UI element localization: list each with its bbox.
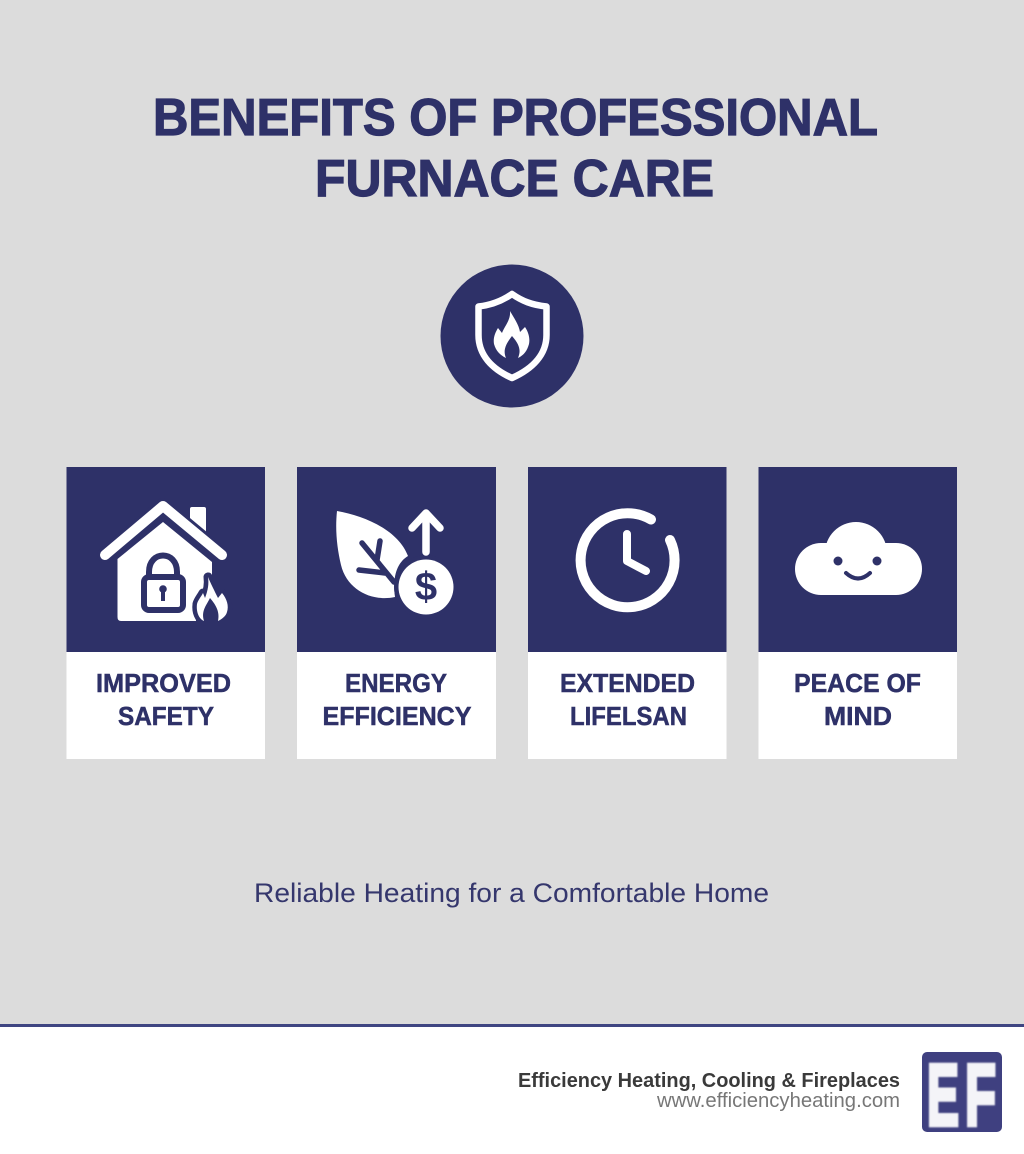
icon: leaf with dollar coin and arrow (336, 511, 458, 619)
website: www.efficiencyheating.com (656, 1090, 900, 1112)
company name: Efficiency Heating, Cooling & Fireplaces (518, 1070, 900, 1092)
label: peace of mind: MIND (824, 701, 892, 731)
label: energy efficiency (322, 668, 472, 731)
icon: clock (581, 513, 675, 607)
label: peace of mind (794, 668, 921, 731)
tagline: Reliable Heating for a Comfortable Home (254, 878, 769, 908)
icon: shield with flame (440, 264, 584, 408)
label: improved safety: SAFETY (118, 701, 214, 731)
panel: improved safety (66, 467, 265, 759)
label: improved safety: IMPROVED (96, 668, 231, 698)
logo: F (965, 1047, 996, 1144)
panel: peace of mind (758, 467, 957, 759)
label: extended lifelsan: LIFELSAN (570, 701, 687, 731)
label: energy efficiency: EFFICIENCY (322, 701, 472, 731)
panel: extended lifespan (528, 467, 726, 759)
title: FURNACE CARE (315, 150, 714, 208)
icon: house with lock and flame (105, 506, 232, 624)
label: peace of mind: PEACE OF (794, 668, 921, 698)
footer (0, 1024, 1024, 1154)
dollar sign: $ (415, 565, 437, 609)
label: improved safety (96, 668, 231, 731)
label: extended lifelsan: EXTENDED (560, 668, 695, 698)
panel: energy efficiency (297, 467, 496, 759)
label: energy efficiency: ENERGY (345, 668, 447, 698)
icon: smiling cloud (795, 522, 922, 595)
label: extended lifelsan (560, 668, 695, 731)
title (153, 89, 878, 208)
logo: E (927, 1047, 959, 1144)
title: BENEFITS OF PROFESSIONAL (153, 89, 878, 147)
